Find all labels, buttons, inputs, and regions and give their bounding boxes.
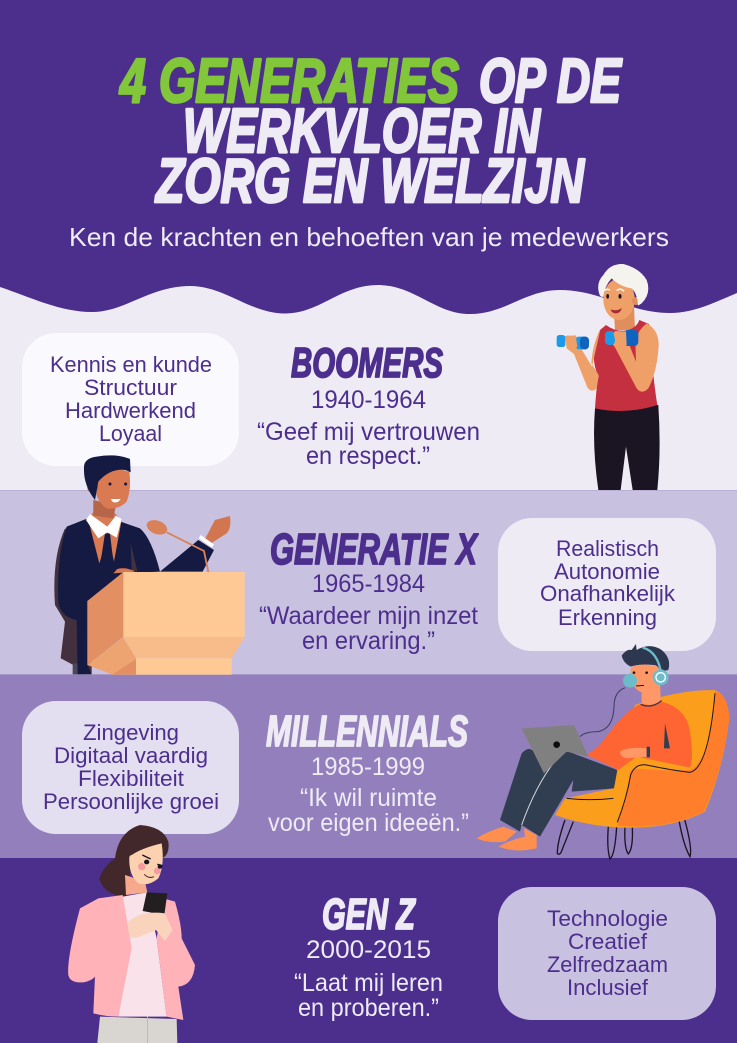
quote: millennials: voor eigen ideeën.”	[268, 809, 469, 837]
strengths card: generatie x: Erkenning	[558, 605, 657, 630]
quote: millennials: “Ik wil ruimte	[300, 784, 437, 812]
strengths card: millennials: Flexibiliteit	[78, 766, 184, 791]
strengths card: generatie x: Onafhankelijk	[540, 581, 676, 606]
icon: man with laptop in armchair	[477, 644, 729, 859]
quote: generatie x: en ervaring.”	[302, 627, 435, 655]
quote: gen z: en proberen.”	[298, 994, 439, 1022]
title: ZORG EN WELZIJN	[155, 147, 585, 216]
title: OP DE	[479, 47, 622, 116]
strengths card: boomers: Hardwerkend	[65, 398, 196, 423]
quote: generatie x	[259, 602, 478, 655]
subtitle: Ken de krachten en behoeften van je medewerkers	[69, 222, 669, 252]
strengths card: millennials: Persoonlijke groei	[43, 789, 219, 814]
strengths card: gen z: Technologie	[547, 906, 668, 931]
strengths card: boomers: Loyaal	[99, 421, 162, 446]
panel background: gen z	[0, 858, 737, 1043]
strengths card: generatie x	[498, 518, 716, 651]
background: header band	[0, 0, 737, 320]
quote: millennials	[268, 784, 469, 837]
years: gen z: 2000-2015	[306, 936, 431, 964]
heading: gen z: GEN Z	[322, 890, 416, 939]
icon: woman with phone	[68, 825, 195, 1043]
strengths card: gen z: Zelfredzaam	[547, 952, 668, 977]
quote: boomers: en respect.”	[306, 442, 430, 470]
panel background: boomers with wave top	[0, 285, 737, 490]
title: 4 GENERATIES	[118, 47, 459, 116]
strengths card: gen z: Creatief	[568, 929, 648, 954]
quote: boomers: “Geef mij vertrouwen	[257, 418, 480, 446]
strengths card: millennials: Digitaal vaardig	[54, 743, 208, 768]
heading: millennials: MILLENNIALS	[266, 707, 468, 756]
years: generatie x: 1965-1984	[312, 570, 425, 598]
quote: gen z	[294, 969, 443, 1022]
years: boomers: 1940-1964	[311, 386, 426, 414]
quote: generatie x: “Waardeer mijn inzet	[259, 602, 478, 630]
heading: boomers: BOOMERS	[291, 339, 443, 386]
icon: speaker at podium	[54, 455, 245, 675]
panel background: generatie x	[0, 490, 737, 674]
panel: millennials	[22, 644, 729, 859]
panel: gen z	[68, 825, 716, 1043]
strengths card: boomers: Kennis en kunde	[50, 352, 212, 377]
strengths card: gen z	[498, 887, 716, 1020]
strengths card: generatie x: Autonomie	[554, 559, 660, 584]
years: millennials: 1985-1999	[311, 753, 425, 781]
quote: gen z: “Laat mij leren	[294, 969, 443, 997]
panel: generatie x	[54, 455, 716, 675]
strengths card: gen z: Inclusief	[567, 975, 649, 1000]
strengths card: boomers: Structuur	[84, 375, 177, 400]
strengths card: millennials: Zingeving	[83, 720, 179, 745]
heading: generatie x: GENERATIE X	[270, 525, 479, 574]
strengths card: boomers	[22, 333, 239, 466]
title: WERKVLOER IN	[183, 97, 541, 166]
strengths card: millennials	[22, 701, 239, 834]
icon: older woman with dumbbells	[557, 264, 660, 490]
quote: boomers	[257, 418, 480, 470]
strengths card: generatie x: Realistisch	[556, 536, 659, 561]
title	[118, 47, 622, 216]
panel: boomers	[22, 264, 660, 490]
panel background: millennials	[0, 674, 737, 858]
